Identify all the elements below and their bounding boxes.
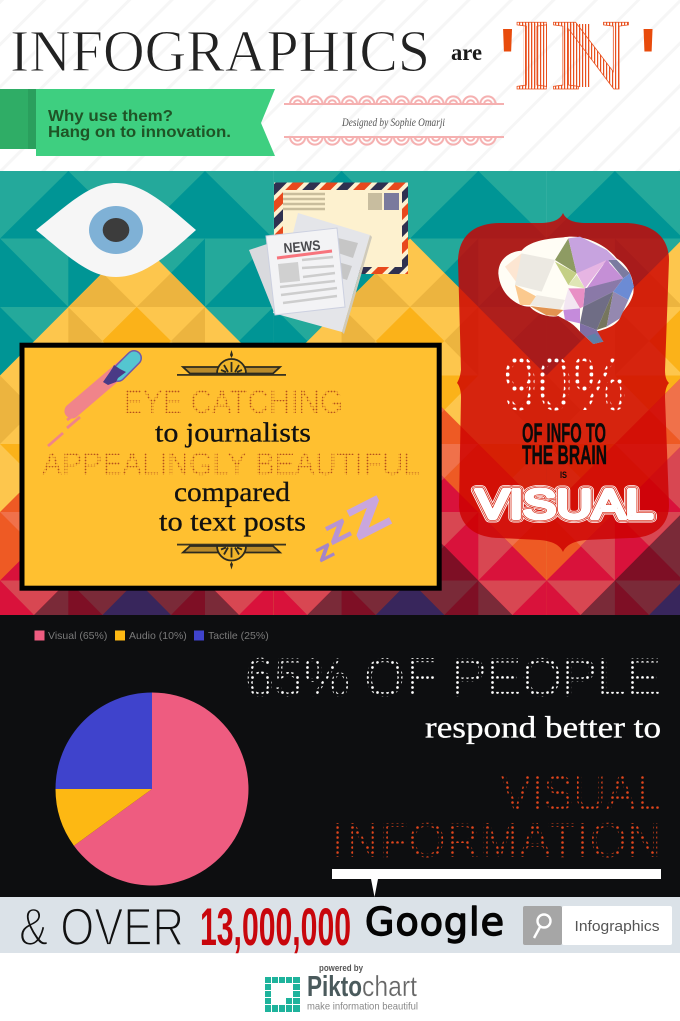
footer: powered by piktochart: make information beautiful [307,1000,418,1012]
text: information: INFORMATION [332,814,661,868]
icon: eye [36,183,196,277]
chart legend: Visual (65%) [48,630,107,642]
search box: Infographics [574,919,660,935]
text: visual: VISUAL [476,481,653,527]
designer credit with scallops [284,93,504,148]
title: INFOGRAPHICS: INFOGRAPHICS [10,18,430,84]
icon: comet [48,358,134,446]
text: visual: VISUAL [476,481,653,527]
chart legend: Tactile (25%) [208,630,269,642]
icon: zzz: Z [321,513,355,550]
title: 'IN': ' [640,11,656,111]
icon: newspapers [249,213,372,334]
banner: why use them [0,89,275,156]
icon: zzz [313,488,397,566]
pie chart [56,692,248,886]
icon: envelope [274,182,408,274]
text: visual: VISUAL [501,767,661,821]
chart legend [34,630,269,642]
banner: why use them: Why use them? [48,108,173,125]
panel: google strip [0,897,680,957]
title: 'IN': IN [513,0,631,112]
title: are: are [451,40,482,65]
icon: zzz: Z [313,540,338,566]
title: 'IN': ' [500,11,516,111]
text: appealingly beautiful: APPEALINGLY BEAUTIFUL [42,446,420,482]
icon: brain [498,237,634,344]
panel: red brain card [457,213,669,552]
chart legend: Audio (10%) [129,630,187,642]
text: visual: VISUAL [476,481,653,527]
header background [0,0,680,171]
panel: black statistics section [0,615,680,897]
search box [523,906,672,945]
title: 'IN' [500,0,656,112]
triangle mosaic background [0,171,680,615]
text: compared: compared [174,476,290,507]
text: Google: Google [365,900,504,944]
panel: yellow callout [22,345,439,588]
icon: piktochart logo [265,977,300,1012]
bracket pointer [332,869,661,897]
text: the brain: THE BRAIN [522,440,607,470]
footer: powered by piktochart: Pikto [307,971,362,1003]
ornament bottom [177,544,286,570]
text: & over: & OVER [19,898,184,957]
footer: powered by piktochart: chart [362,971,417,1003]
text: is: IS [560,470,567,480]
text: visual: VISUAL [476,481,653,527]
text: visual: VISUAL [476,481,653,527]
text: respond better to: respond better to [425,710,661,744]
icon: newspapers: NEWS [283,237,321,256]
icon: magnifier [534,914,550,938]
text: 90%: 90% [503,342,627,427]
designer credit with scallops: Designed by Sophie Omarji [341,117,445,129]
footer: powered by piktochart: powered by [319,963,363,973]
banner: why use them: Hang on to innovation. [48,124,231,141]
text: to text posts: to text posts [159,506,306,536]
text: eye catching: EYE CATCHING [123,384,343,420]
text: 65% of people: 65% OF PEOPLE [245,646,661,708]
footer: powered by piktochart [265,963,418,1012]
icon: zzz: Z [341,488,397,549]
ornament top [177,350,286,376]
text: of info to: OF INFO TO [522,418,606,448]
text: to journalists: to journalists [155,416,311,448]
text: 13,000,000: 13,000,000 [200,898,351,957]
